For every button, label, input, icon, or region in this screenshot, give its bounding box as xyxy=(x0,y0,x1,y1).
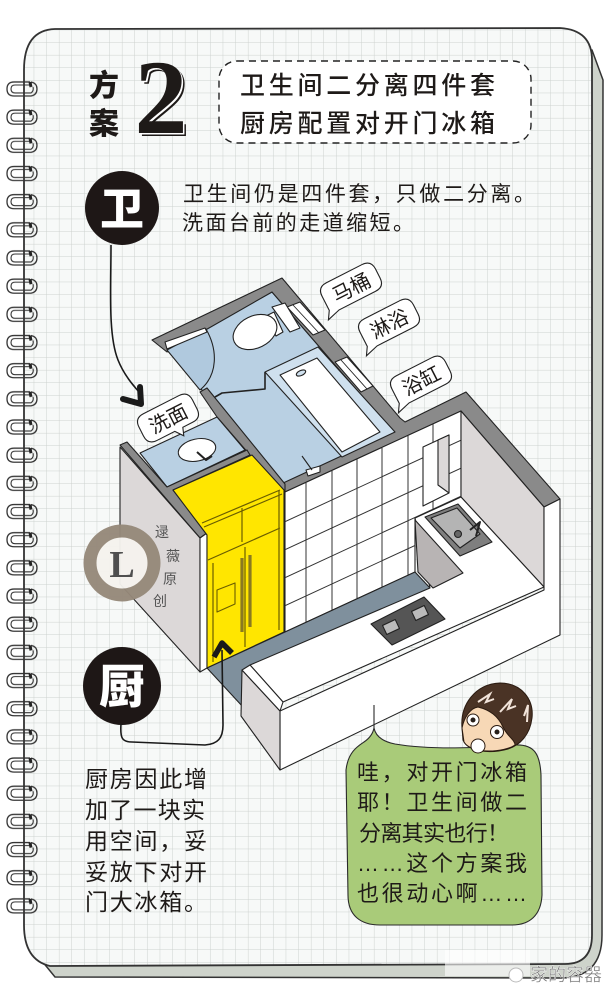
bottom-right watermark xyxy=(445,950,602,985)
toilet xyxy=(272,303,300,332)
title: 方案 2: 案 xyxy=(89,108,119,141)
yellow fridge xyxy=(173,455,284,668)
right wall inner xyxy=(461,411,544,587)
speech bubble: green: ……这个方案我 xyxy=(357,851,527,876)
label: 浴缸 xyxy=(383,353,456,413)
text block: kitchen note: 妥放下对开 xyxy=(85,859,207,885)
arrow: bathroom xyxy=(111,245,143,404)
left wall xyxy=(120,447,200,672)
wall niche xyxy=(423,435,449,506)
title: 方案 2: 方 xyxy=(89,69,119,103)
heading box: dashed xyxy=(219,61,531,143)
watermark seal: 原 xyxy=(163,571,177,587)
counter top xyxy=(250,497,544,702)
label: 淋浴: 淋浴 xyxy=(367,305,413,344)
text block: kitchen note xyxy=(85,766,207,915)
bathroom floor xyxy=(167,292,393,486)
shower fixture xyxy=(302,456,320,476)
counter end wall xyxy=(241,670,280,770)
bathroom outer walls xyxy=(152,278,560,507)
bottom-right watermark: 家的容器 xyxy=(530,965,602,985)
speech bubble: green: 哇，对开门冰箱 xyxy=(357,760,527,785)
watermark seal: 创 xyxy=(153,593,167,609)
watermark seal: L xyxy=(109,544,135,586)
title: 方案 2: 2 xyxy=(138,42,190,159)
floor plan: isometric apartment xyxy=(120,278,560,770)
label: 淋浴 xyxy=(351,296,424,356)
watermark seal: 薇 xyxy=(166,548,180,564)
text block: kitchen note: 厨房因此增 xyxy=(85,766,207,792)
wash area floor and wall xyxy=(140,417,245,487)
title: 方案 2: 2 xyxy=(136,40,189,158)
heading box: dashed: 厨房配置对开门冰箱 xyxy=(240,110,495,138)
label: 马桶 xyxy=(313,260,386,320)
arrow: kitchen xyxy=(121,643,232,745)
title: 方案 2 xyxy=(89,39,190,159)
bathtub xyxy=(265,347,395,457)
badge: 卫: 卫 xyxy=(100,185,144,234)
watermark seal xyxy=(90,524,180,609)
label: 洗面: 洗面 xyxy=(146,400,192,439)
right wall end xyxy=(280,499,560,770)
text block: bathroom note: 洗面台前的走道缩短。 xyxy=(182,212,414,235)
gas stove xyxy=(371,597,445,645)
watermark seal: 逯 xyxy=(155,524,169,540)
partition wall between wash area and bath xyxy=(200,388,285,492)
heading box: dashed: 卫生间二分离四件套 xyxy=(240,72,495,100)
sink xyxy=(425,504,492,556)
badge: 卫 xyxy=(85,171,159,245)
character: surprised boy xyxy=(462,683,532,753)
kitchen tiled wall xyxy=(285,411,461,632)
windows xyxy=(287,302,325,335)
speech bubble: green xyxy=(346,705,542,925)
label: 马桶: 马桶 xyxy=(329,269,375,308)
text block: kitchen note: 加了一块实 xyxy=(85,797,205,823)
text block: bathroom note xyxy=(182,183,535,235)
text block: kitchen note: 用空间，妥 xyxy=(85,828,207,854)
badge: 厨 xyxy=(83,647,161,725)
title: 方案 2: 2 xyxy=(134,39,188,156)
speech bubble: green: 也很动心啊…… xyxy=(357,881,527,906)
spiral binding rings xyxy=(0,74,44,920)
label: 浴缸: 浴缸 xyxy=(399,362,445,401)
text block: bathroom note: 卫生间仍是四件套，只做二分离。 xyxy=(183,183,535,206)
kitchen floor xyxy=(207,572,430,707)
badge: 厨: 厨 xyxy=(99,661,145,713)
speech bubble: green: 耶！卫生间做二 xyxy=(357,790,527,815)
speech bubble: green: 分离其实也行！ xyxy=(359,821,509,846)
text block: kitchen note: 门大冰箱。 xyxy=(85,889,207,915)
label: 洗面 xyxy=(134,391,205,452)
door xyxy=(167,329,214,390)
